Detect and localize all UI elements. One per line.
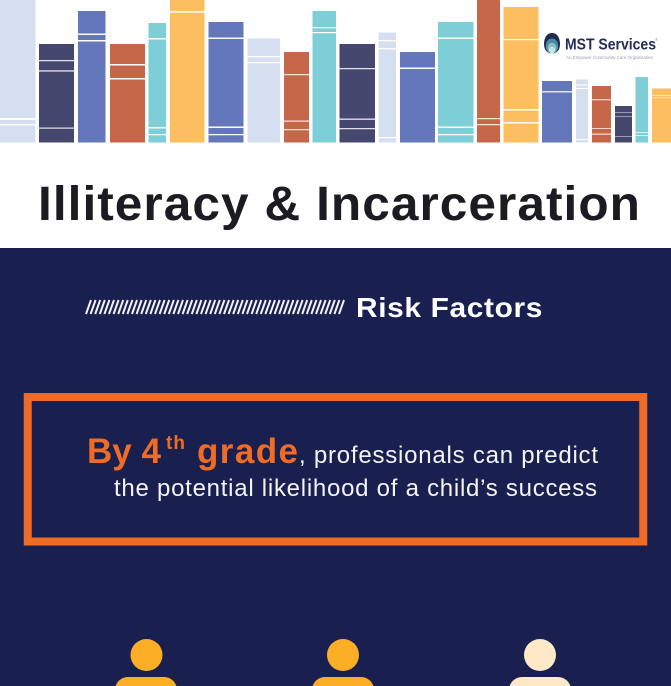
callout highlight word: grade bbox=[197, 432, 298, 471]
icon: nested dome logo mark bbox=[544, 33, 560, 54]
book 3 bbox=[78, 11, 106, 142]
book 22 bbox=[652, 88, 671, 142]
book 20 bbox=[615, 106, 632, 142]
logo wordmark: MST Services bbox=[565, 36, 656, 54]
book 19 bbox=[592, 86, 611, 142]
heading: risk factors: Risk Factors bbox=[356, 292, 543, 323]
callout superscript: th bbox=[166, 433, 185, 454]
book 4 bbox=[110, 44, 145, 142]
icon: person 3 bbox=[509, 639, 571, 686]
icon: diagonal stripe bar bbox=[86, 300, 344, 314]
book 5 bbox=[148, 23, 166, 142]
navy background panel bbox=[0, 248, 671, 686]
callout text line 1: , professionals can predict bbox=[299, 442, 598, 469]
book 16 bbox=[504, 7, 538, 142]
title: Illiteracy & Incarceration bbox=[38, 178, 641, 231]
bookshelf illustration bbox=[0, 0, 671, 142]
book 18 bbox=[576, 80, 588, 142]
callout panel bbox=[28, 397, 643, 542]
logo tagline: An Empower Community Care Organization bbox=[566, 55, 653, 60]
book 9 bbox=[284, 52, 309, 142]
book 8 bbox=[248, 38, 280, 142]
callout border bbox=[28, 397, 643, 542]
book 21 bbox=[636, 77, 648, 142]
callout highlight number: By 4 bbox=[87, 432, 162, 471]
logo: MST Services bbox=[544, 33, 658, 60]
book 6 bbox=[170, 0, 204, 142]
icon: person 1 bbox=[115, 639, 177, 686]
book 13 bbox=[400, 52, 435, 142]
book 17 bbox=[542, 81, 572, 142]
book 1 bbox=[0, 0, 36, 142]
book 11 bbox=[340, 44, 375, 142]
book 10 bbox=[312, 11, 336, 142]
book 7 bbox=[208, 22, 244, 142]
book 14 bbox=[438, 22, 474, 142]
callout text line 2: the potential likelihood of a child’s success bbox=[114, 475, 597, 502]
logo registered mark: ® bbox=[655, 37, 658, 42]
book 15 bbox=[477, 0, 500, 142]
book 12 bbox=[378, 32, 396, 142]
book 2 bbox=[39, 44, 74, 142]
icon: person 2 bbox=[312, 639, 374, 686]
